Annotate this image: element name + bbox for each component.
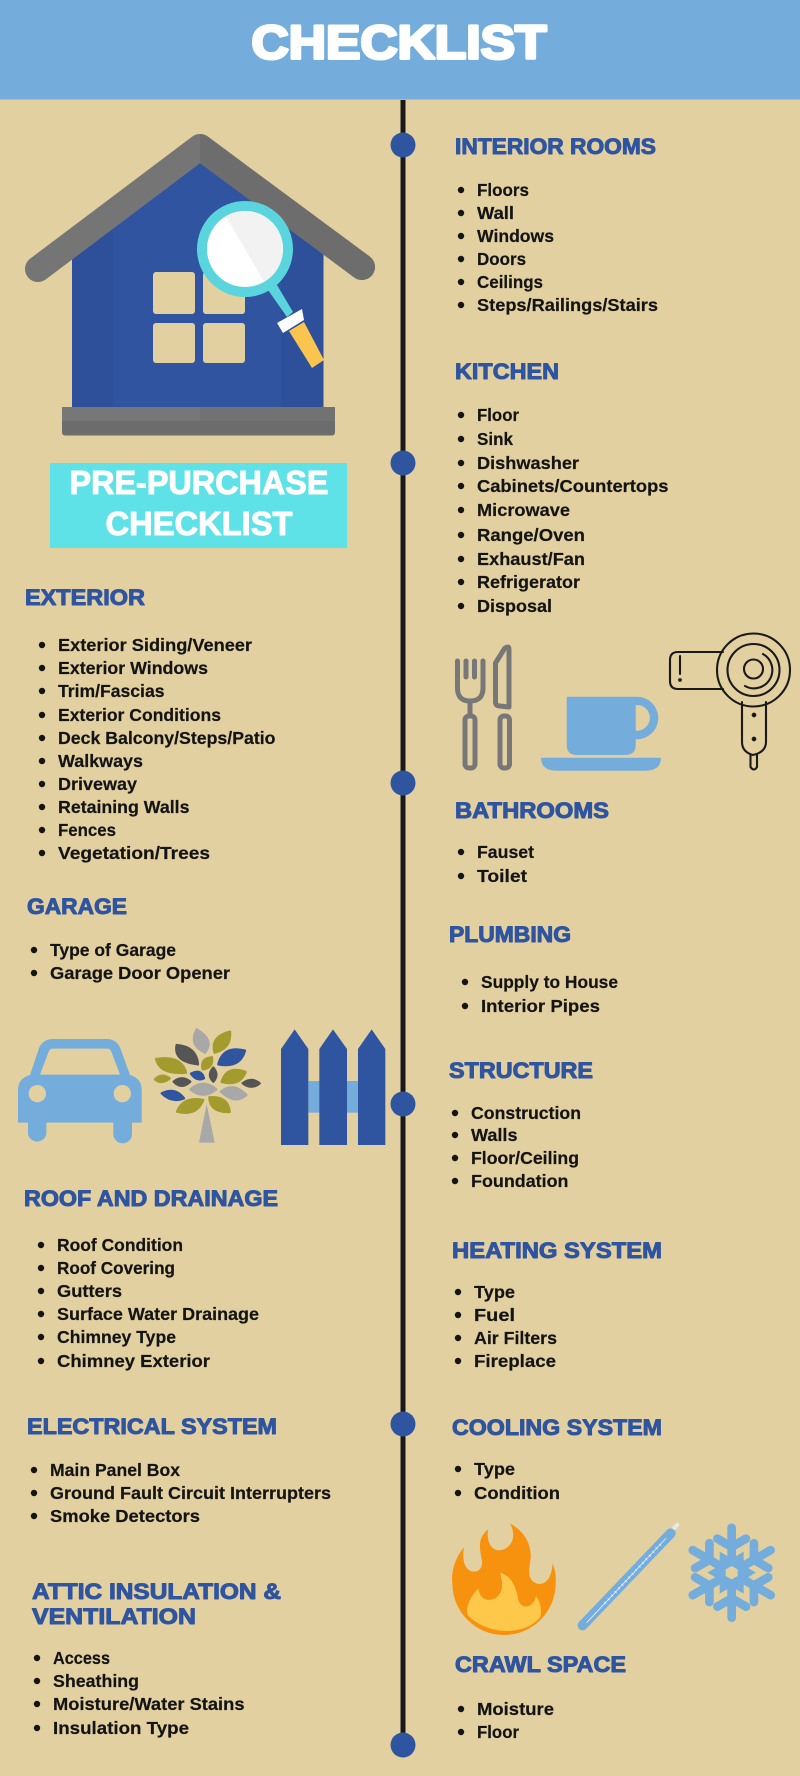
list: interior items: Doors bbox=[477, 249, 526, 269]
list: interior items: Steps/Railings/Stairs bbox=[477, 295, 658, 315]
icon: fence bbox=[281, 1029, 385, 1145]
icon: thermometer bbox=[583, 1525, 677, 1625]
heading: garage: GARAGE bbox=[27, 894, 127, 919]
list: interior items bbox=[458, 180, 658, 315]
list: cooling items: Condition bbox=[474, 1483, 560, 1503]
icon: tree bbox=[155, 1029, 260, 1143]
banner: pre-purchase checklist bbox=[50, 463, 347, 548]
list: structure items bbox=[452, 1103, 581, 1191]
list: garage items: Type of Garage bbox=[50, 940, 176, 960]
list: exterior items: Exterior Siding/Veneer bbox=[58, 635, 252, 655]
icon: car bbox=[18, 1039, 142, 1143]
panel: exterior bbox=[25, 585, 276, 863]
heading: plumbing: PLUMBING bbox=[449, 922, 571, 947]
heading: heating system: HEATING SYSTEM bbox=[452, 1238, 662, 1263]
list: exterior items: Fences bbox=[58, 820, 116, 840]
list: roof items: Surface Water Drainage bbox=[57, 1304, 259, 1324]
list: heating items: Fireplace bbox=[474, 1351, 556, 1371]
list: attic items: Sheathing bbox=[53, 1671, 139, 1691]
panel: roof and drainage bbox=[24, 1186, 278, 1371]
list: crawl space items bbox=[458, 1699, 554, 1742]
heading: attic insulation and ventilation: VENTILATION bbox=[32, 1604, 196, 1629]
list: kitchen items: Exhaust/Fan bbox=[477, 549, 585, 569]
panel: attic insulation and ventilation bbox=[32, 1579, 281, 1738]
list: structure items: Floor/Ceiling bbox=[471, 1148, 579, 1168]
list: interior items: Floors bbox=[477, 180, 529, 200]
banner: pre-purchase checklist: CHECKLIST bbox=[106, 505, 292, 542]
list: kitchen items: Sink bbox=[477, 429, 513, 449]
icon: flame bbox=[452, 1523, 556, 1635]
list: kitchen items: Cabinets/Countertops bbox=[477, 476, 669, 496]
list: exterior items: Deck Balcony/Steps/Patio bbox=[58, 728, 276, 748]
list: kitchen items: Refrigerator bbox=[477, 572, 580, 592]
title: CHECKLIST bbox=[252, 16, 547, 68]
list: roof items: Chimney Type bbox=[57, 1327, 176, 1347]
list: structure items: Construction bbox=[471, 1103, 581, 1123]
list: bathroom items: Fauset bbox=[477, 842, 534, 862]
heading: structure: STRUCTURE bbox=[449, 1058, 593, 1083]
list: heating items: Air Filters bbox=[474, 1328, 557, 1348]
list: interior items: Wall bbox=[477, 203, 514, 223]
list: roof items: Roof Covering bbox=[57, 1258, 175, 1278]
list: roof items: Chimney Exterior bbox=[57, 1351, 210, 1371]
heading: crawl space: CRAWL SPACE bbox=[455, 1652, 626, 1677]
list: attic items: Moisture/Water Stains bbox=[53, 1694, 245, 1714]
list: kitchen items: Floor bbox=[477, 405, 519, 425]
list: garage items bbox=[31, 940, 230, 983]
list: exterior items: Exterior Windows bbox=[58, 658, 208, 678]
list: exterior items: Driveway bbox=[58, 774, 137, 794]
list: exterior items: Retaining Walls bbox=[58, 797, 190, 817]
list: crawl space items: Floor bbox=[477, 1722, 519, 1742]
timeline bbox=[390, 100, 416, 1758]
list: cooling items bbox=[455, 1459, 560, 1503]
panel: garage bbox=[27, 894, 230, 983]
heading: attic insulation and ventilation: ATTIC INSULATION & bbox=[32, 1579, 281, 1604]
heading: kitchen: KITCHEN bbox=[455, 359, 559, 384]
banner: pre-purchase checklist: PRE-PURCHASE bbox=[70, 464, 328, 501]
heading: roof and drainage: ROOF AND DRAINAGE bbox=[24, 1186, 278, 1211]
icon: hair dryer bbox=[670, 634, 790, 770]
icon: house with magnifying glass bbox=[38, 147, 362, 436]
list: heating items: Fuel bbox=[474, 1305, 515, 1325]
list: interior items: Ceilings bbox=[477, 272, 543, 292]
panel: crawl space bbox=[455, 1652, 626, 1742]
header banner bbox=[0, 0, 800, 100]
panel: structure bbox=[449, 1058, 593, 1191]
icon: fork and knife bbox=[458, 647, 510, 768]
list: electrical items: Ground Fault Circuit Interrupters bbox=[50, 1483, 331, 1503]
list: plumbing items bbox=[462, 972, 618, 1016]
list: kitchen items: Dishwasher bbox=[477, 453, 579, 473]
list: attic items bbox=[34, 1648, 245, 1738]
list: exterior items: Vegetation/Trees bbox=[58, 843, 210, 863]
panel: heating system bbox=[452, 1238, 662, 1371]
list: roof items: Roof Condition bbox=[57, 1235, 183, 1255]
list: exterior items bbox=[39, 635, 275, 863]
list: roof items: Gutters bbox=[57, 1281, 122, 1301]
list: attic items: Insulation Type bbox=[53, 1718, 189, 1738]
list: kitchen items bbox=[458, 405, 669, 616]
list: kitchen items: Range/Oven bbox=[477, 525, 585, 545]
list: exterior items: Exterior Conditions bbox=[58, 705, 221, 725]
list: bathroom items: Toilet bbox=[477, 866, 527, 886]
heading: cooling system: COOLING SYSTEM bbox=[452, 1415, 662, 1440]
list: exterior items: Trim/Fascias bbox=[58, 681, 165, 701]
heading: electrical system: ELECTRICAL SYSTEM bbox=[27, 1414, 277, 1439]
heading: attic insulation and ventilation bbox=[32, 1579, 281, 1629]
list: kitchen items: Disposal bbox=[477, 596, 552, 616]
icon: magnifying glass bbox=[197, 201, 324, 368]
heading: interior rooms: INTERIOR ROOMS bbox=[455, 134, 656, 159]
list: garage items: Garage Door Opener bbox=[50, 963, 230, 983]
list: structure items: Walls bbox=[471, 1125, 518, 1145]
icon: coffee cup bbox=[541, 697, 661, 771]
panel: interior rooms bbox=[455, 134, 658, 315]
list: plumbing items: Supply to House bbox=[481, 972, 618, 992]
list: heating items bbox=[455, 1282, 557, 1371]
panel: bathrooms bbox=[455, 798, 609, 886]
panel: kitchen bbox=[455, 359, 669, 616]
list: electrical items: Main Panel Box bbox=[50, 1460, 180, 1480]
heading: bathrooms: BATHROOMS bbox=[455, 798, 609, 823]
list: crawl space items: Moisture bbox=[477, 1699, 554, 1719]
list: plumbing items: Interior Pipes bbox=[481, 996, 600, 1016]
list: roof items bbox=[38, 1235, 259, 1371]
list: cooling items: Type bbox=[474, 1459, 515, 1479]
heading: exterior: EXTERIOR bbox=[25, 585, 145, 610]
list: attic items: Access bbox=[53, 1648, 110, 1668]
list: kitchen items: Microwave bbox=[477, 500, 570, 520]
list: bathroom items bbox=[458, 842, 534, 886]
list: structure items: Foundation bbox=[471, 1171, 568, 1191]
panel: plumbing bbox=[449, 922, 618, 1016]
panel: electrical system bbox=[27, 1414, 331, 1526]
icon: snowflake bbox=[686, 1528, 778, 1618]
list: exterior items: Walkways bbox=[58, 751, 143, 771]
list: heating items: Type bbox=[474, 1282, 515, 1302]
list: interior items: Windows bbox=[477, 226, 554, 246]
panel: cooling system bbox=[452, 1415, 662, 1503]
list: electrical items bbox=[31, 1460, 331, 1526]
list: electrical items: Smoke Detectors bbox=[50, 1506, 200, 1526]
